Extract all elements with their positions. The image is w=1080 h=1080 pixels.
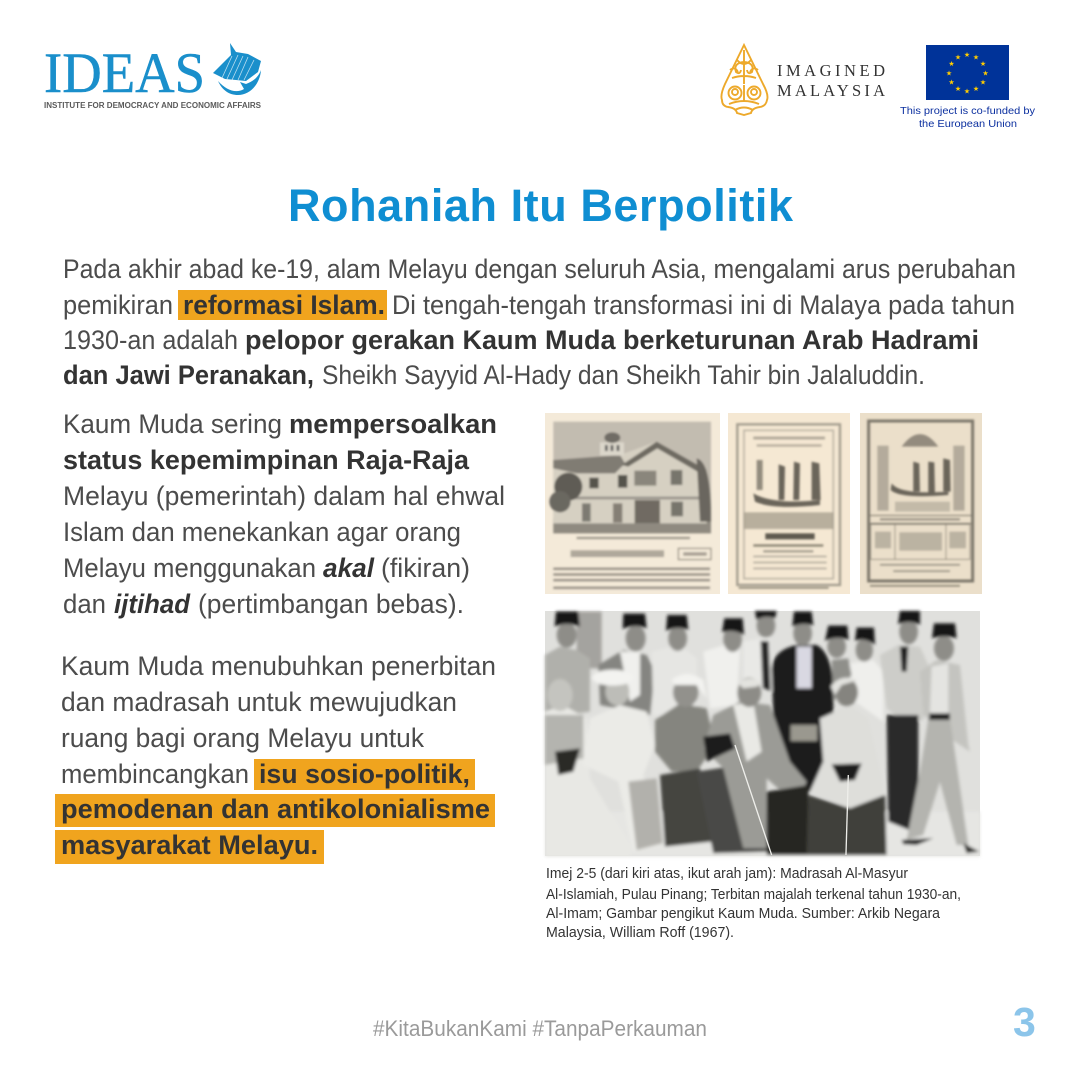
text block: introduction: pelopor gerakan Kaum Muda berketurunan Arab Hadrami xyxy=(245,325,979,355)
logo: European Union flag: ★ xyxy=(973,85,979,93)
text block: Kaum Muda questioning: Melayu (pemerintah) dalam hal ehwal xyxy=(63,481,505,511)
text block: publications and madrasah: Kaum Muda menubuhkan penerbitan xyxy=(61,651,496,681)
text block: introduction xyxy=(63,254,1016,390)
icon: gold wayang ornament xyxy=(721,45,768,115)
text: funding note xyxy=(900,105,1036,130)
text block: publications and madrasah xyxy=(55,651,496,864)
title: Rohaniah Itu Berpolitik xyxy=(288,180,794,231)
text block: publications and madrasah: membincangkan xyxy=(61,759,249,789)
text: image caption: Malaysia, William Roff (1967). xyxy=(546,925,734,941)
footer hashtags: #KitaBukanKami #TanpaPerkauman xyxy=(373,1016,707,1041)
text: funding note: This project is co-funded by xyxy=(900,105,1036,117)
text block: introduction: 1930-an adalah xyxy=(63,325,238,355)
text block: introduction: dan Jawi Peranakan, xyxy=(63,360,314,390)
text block: Kaum Muda questioning: (fikiran) xyxy=(381,553,470,583)
logo: IDEAS: IDEAS xyxy=(44,42,205,105)
logo: European Union flag: ★ xyxy=(982,70,989,78)
text block: Kaum Muda questioning: (pertimbangan bebas). xyxy=(198,589,464,619)
logo: Imagined Malaysia: MALAYSIA xyxy=(777,81,885,100)
text block: Kaum Muda questioning: ijtihad xyxy=(114,589,190,619)
text block: introduction: Pada akhir abad ke-19, alam Melayu dengan seluruh Asia, mengalami arus perubahan xyxy=(63,254,1016,284)
text block: introduction: Sheikh Sayyid Al-Hady dan Sheikh Tahir bin Jalaluddin. xyxy=(322,360,925,390)
text: funding note: the European Union xyxy=(919,118,1017,130)
text: image caption: Al-Islamiah, Pulau Pinang; Terbitan majalah terkenal tahun 1930-an, xyxy=(546,887,961,903)
text block: introduction: reformasi Islam. xyxy=(183,290,385,320)
image: group photograph of Kaum Muda followers xyxy=(545,611,980,857)
image: Al-Imam magazine cover xyxy=(728,413,850,594)
text block: Kaum Muda questioning: mempersoalkan xyxy=(289,409,497,439)
logo: European Union flag: ★ xyxy=(980,78,986,86)
image: Madrasah Al-Masyur building xyxy=(545,413,720,594)
logo: European Union flag: ★ xyxy=(946,70,952,78)
logo: Imagined Malaysia xyxy=(721,45,885,115)
text block: Kaum Muda questioning: akal xyxy=(323,553,374,583)
logo: European Union flag: ★ xyxy=(980,60,986,68)
page number: 3 xyxy=(1013,999,1036,1045)
logo: European Union flag xyxy=(900,45,1036,130)
logo: European Union flag: ★ xyxy=(964,51,970,59)
text block: Kaum Muda questioning: Melayu menggunakan xyxy=(63,553,316,583)
text block: publications and madrasah: dan madrasah untuk mewujudkan xyxy=(61,687,457,717)
text: image caption: Al-Imam; Gambar pengikut Kaum Muda. Sumber: Arkib Negara xyxy=(546,906,941,922)
logo: European Union flag: ★ xyxy=(948,78,955,86)
text block: publications and madrasah: masyarakat Melayu. xyxy=(61,830,318,860)
text block: Kaum Muda questioning: Kaum Muda sering xyxy=(63,409,282,439)
image: Al-Ikhwan magazine cover xyxy=(860,413,982,594)
text: image caption: Imej 2-5 (dari kiri atas, ikut arah jam): Madrasah Al-Masyur xyxy=(546,866,908,882)
logo: European Union flag: ★ xyxy=(973,54,979,62)
logo: European Union flag: ★ xyxy=(948,60,955,68)
text block: introduction: Di tengah-tengah transformasi ini di Malaya pada tahun xyxy=(392,290,1015,320)
logo: European Union flag: ★ xyxy=(964,88,970,96)
text block: publications and madrasah: ruang bagi orang Melayu untuk xyxy=(61,723,424,753)
text block: Kaum Muda questioning: Islam dan menekankan agar orang xyxy=(63,517,461,547)
text block: introduction: pemikiran xyxy=(63,290,173,320)
logo: IDEAS: INSTITUTE FOR DEMOCRACY AND ECONOMIC AFFAIRS xyxy=(44,100,261,110)
text block: Kaum Muda questioning: dan xyxy=(63,589,106,619)
logo: European Union flag: ★ xyxy=(955,85,961,93)
text: image caption xyxy=(546,866,961,941)
text block: publications and madrasah: isu sosio-politik, xyxy=(259,759,470,789)
logo: Imagined Malaysia: IMAGINED xyxy=(777,61,885,80)
text block: Kaum Muda questioning xyxy=(63,409,505,619)
text block: publications and madrasah: pemodenan dan antikolonialisme xyxy=(61,794,490,824)
icon: IDEAS bird xyxy=(213,43,261,95)
logo: European Union flag: ★ xyxy=(955,54,961,62)
text block: Kaum Muda questioning: status kepemimpinan Raja-Raja xyxy=(63,445,470,475)
